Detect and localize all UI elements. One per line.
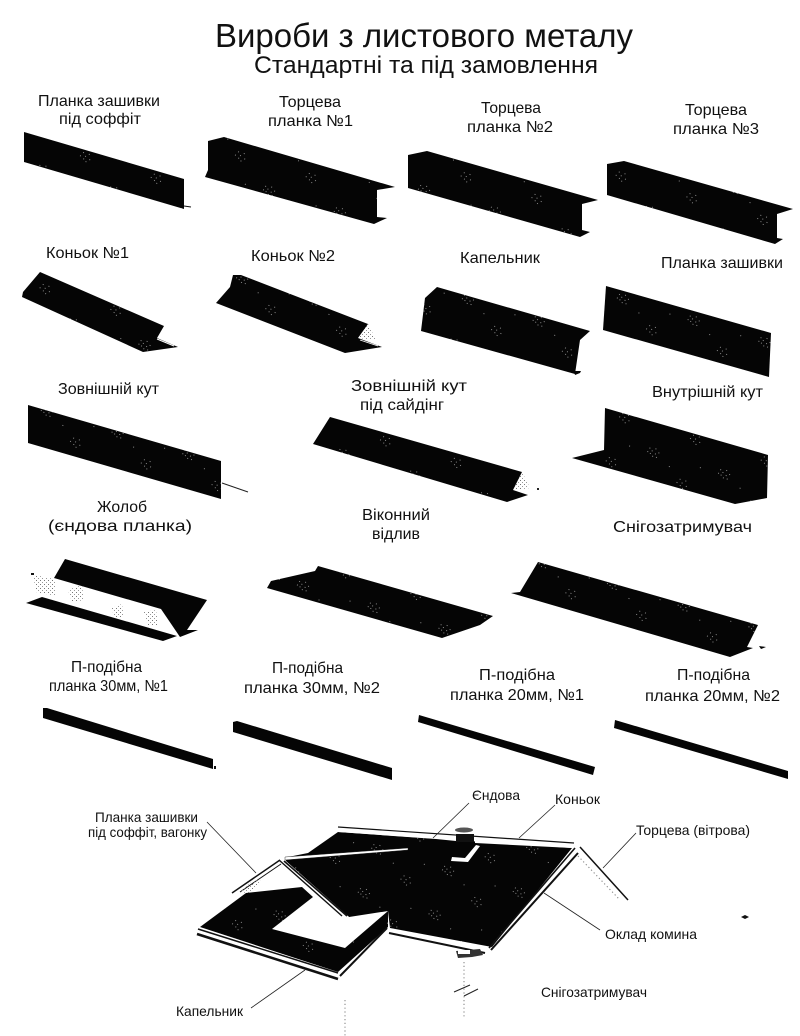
panel: Планка зашивки під соффіт: під соффіт <box>59 111 142 128</box>
panel: Коньок №1: Коньок №1 <box>46 245 129 262</box>
ridge <box>338 827 574 848</box>
panel: Торцева планка №1: планка №1 <box>268 113 353 130</box>
black speck <box>741 915 749 919</box>
panel: П-подібна планка 30мм, №2: планка 30мм, №2 <box>244 680 380 697</box>
panel: Планка зашивки <box>603 255 783 377</box>
panel: П-подібна планка 20мм, №1 <box>418 667 595 775</box>
eaves <box>197 928 485 979</box>
subtitle: Стандартні та під замовлення <box>254 52 598 79</box>
panel: П-подібна планка 20мм, №1: П-подібна <box>479 667 555 684</box>
panel: Зовнішній кут <box>28 381 248 499</box>
panel: Зовнішній кут: Зовнішній кут <box>58 381 160 398</box>
panel: П-подібна планка 20мм, №2: планка 20мм, №2 <box>645 688 780 705</box>
callout: Планка зашивки під соффіт, вагонку <box>88 809 256 873</box>
panel: Капельник: Капельник <box>460 250 541 267</box>
panel: Снігозатримувач: Снігозатримувач <box>613 519 752 536</box>
title: Вироби з листового металу <box>215 17 633 54</box>
panel: П-подібна планка 30мм, №1 <box>43 659 216 769</box>
panel: Планка зашивки під соффіт <box>24 93 191 209</box>
panel: Торцева планка №3: планка №3 <box>673 121 759 138</box>
panel: Планка зашивки під соффіт: Планка зашивки <box>38 93 160 110</box>
roof surface: main slope <box>285 832 572 947</box>
panel: Торцева планка №2: Торцева <box>481 100 541 117</box>
callout: Єндова <box>433 787 520 838</box>
callout: Коньок: Коньок <box>555 791 601 807</box>
panel: Коньок №2: Коньок №2 <box>251 248 335 265</box>
roof surface: lower wing <box>200 887 388 972</box>
snow guard and dotted supports <box>345 949 483 1036</box>
panel: Зовнішній кут під сайдінг: під сайдінг <box>360 397 444 414</box>
panel: Торцева планка №2 <box>408 100 598 237</box>
panel: Внутрішній кут <box>572 384 768 504</box>
panel: Віконний відлив <box>267 507 493 638</box>
panel: Торцева планка №1: Торцева <box>279 94 341 111</box>
panel: Снігозатримувач <box>511 519 766 657</box>
panel: П-подібна планка 20мм, №2 <box>614 667 788 779</box>
panel: Жолоб (єндова планка): Жолоб <box>97 499 147 516</box>
callout: Оклад комина <box>544 893 697 942</box>
panel: Жолоб (єндова планка) <box>26 499 207 641</box>
panel: П-подібна планка 20мм, №1: планка 20мм, №1 <box>450 687 584 704</box>
panel: П-подібна планка 30мм, №1: П-подібна <box>71 659 142 676</box>
panel: Жолоб (єндова планка): (єндова планка) <box>48 518 192 535</box>
panel: Торцева планка №3 <box>607 102 793 244</box>
panel: Планка зашивки: Планка зашивки <box>661 255 783 272</box>
callout: Коньок <box>519 791 601 838</box>
panel: Торцева планка №1 <box>205 94 395 224</box>
callout: Оклад комина: Оклад комина <box>605 926 697 942</box>
panel: П-подібна планка 20мм, №2: П-подібна <box>677 667 750 684</box>
valley strip <box>285 848 408 860</box>
panel: Зовнішній кут під сайдінг: Зовнішній кут <box>351 378 468 395</box>
panel: П-подібна планка 30мм, №1: планка 30мм, №1 <box>49 678 168 695</box>
panel: Віконний відлив: відлив <box>372 526 420 543</box>
panel: П-подібна планка 30мм, №2 <box>233 660 392 780</box>
callout: Планка зашивки під соффіт, вагонку: під соффіт, вагонку <box>88 824 207 840</box>
panel: Коньок №1 <box>22 245 178 352</box>
callout: Торцева (вітрова): Торцева (вітрова) <box>636 822 750 838</box>
panel: Торцева планка №2: планка №2 <box>467 119 553 136</box>
panel: Коньок №2 <box>216 248 382 353</box>
chimney flashing <box>451 845 480 862</box>
panel: Внутрішній кут: Внутрішній кут <box>652 384 764 401</box>
callout: Капельник: Капельник <box>176 1003 244 1019</box>
dormer fascia <box>232 859 349 917</box>
panel: Віконний відлив: Віконний <box>362 507 430 524</box>
callout: Капельник <box>176 970 305 1019</box>
callout: Єндова: Єндова <box>472 787 520 803</box>
panel: Зовнішній кут під сайдінг <box>313 378 539 502</box>
callout: Планка зашивки під соффіт, вагонку: Планка зашивки <box>95 809 198 825</box>
callout: Снігозатримувач: Снігозатримувач <box>541 984 647 1000</box>
roof diagram <box>197 827 749 1036</box>
callout: Торцева (вітрова) <box>603 822 750 868</box>
panel: Капельник <box>421 250 590 375</box>
panel: Торцева планка №3: Торцева <box>685 102 747 119</box>
right fascia <box>489 847 628 950</box>
panel: П-подібна планка 30мм, №2: П-подібна <box>272 660 343 677</box>
